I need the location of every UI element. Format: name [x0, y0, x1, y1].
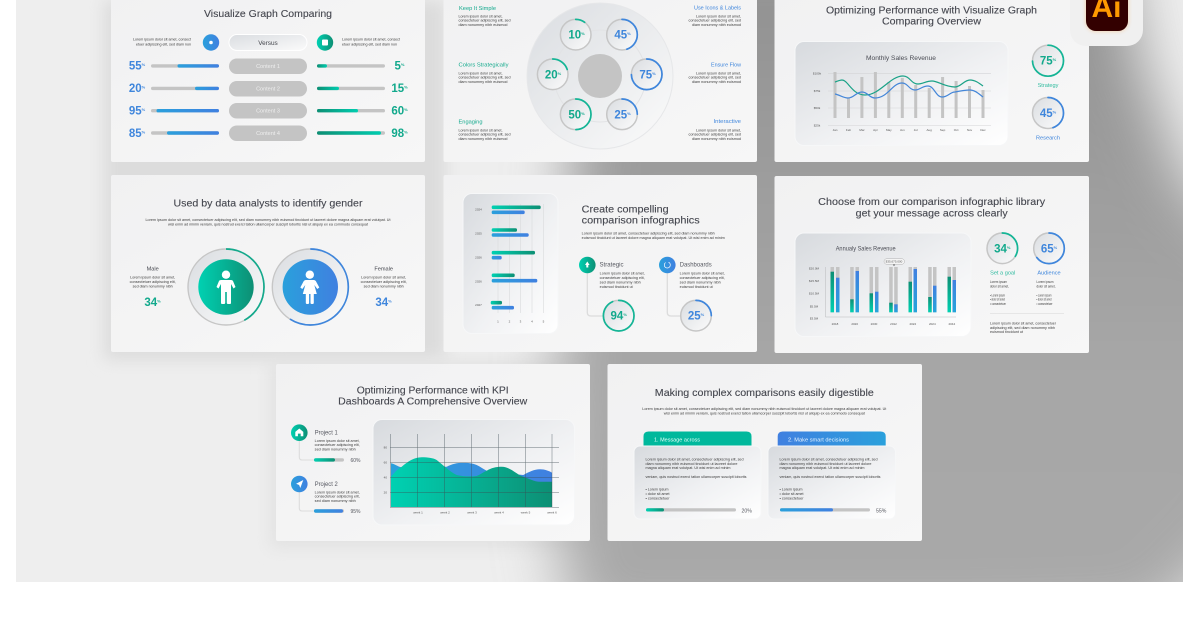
card: make smart decisions: veniam, quis nostrud exerci tation ullamcorper suscipit lobortis [780, 475, 881, 479]
heading: Create compelling [582, 204, 669, 216]
project 1: sed diam nonummy nibh [315, 448, 356, 452]
donut: strategy 75% [1032, 45, 1064, 89]
set a goal text: Lorem ipsum [990, 280, 1007, 284]
row: content 4: % [404, 130, 408, 134]
strategic text: euismod tincidunt ut [600, 285, 633, 289]
card: message across: diam nonummy nibh euismod tincidunt ut laoreet dolore [646, 462, 738, 466]
chart: annual sales revenue: 2012 [890, 322, 897, 326]
chart: horizontal bars: 1 [497, 320, 499, 324]
donut 75%: % [652, 71, 656, 76]
donut: 25%: % [701, 312, 705, 317]
card: message across: • consectetuer [646, 496, 670, 500]
donut 25%: % [627, 111, 631, 116]
chart: monthly sales revenue: $50k [814, 106, 821, 110]
description: euismod tincidunt ut laoreet dolore magna aliquam erat volutpat. Ut wisi enim ad minim [582, 236, 725, 240]
audience text: Audience [1037, 270, 1061, 276]
right description: etuer adipiscing elit, sed diam non [342, 42, 397, 46]
radial disc [527, 3, 673, 149]
donut 45% [607, 19, 637, 50]
left description [133, 38, 191, 46]
panel: compelling comparison [444, 175, 757, 352]
description [146, 218, 390, 226]
row: content 2: 15 [391, 83, 404, 95]
connectors [299, 440, 314, 511]
row: content 4: 98 [391, 128, 404, 140]
tab: make smart decisions [778, 432, 886, 447]
use icons and labels: Lorem ipsum dolor sit amet, [696, 14, 741, 18]
colors strategically: Lorem ipsum dolor sit amet, [458, 72, 502, 76]
versus pill: Versus [258, 40, 278, 47]
row: content 2 [129, 81, 408, 96]
donut: research 45%: 45 [1040, 108, 1053, 120]
row: content 4: 85 [129, 128, 142, 140]
chart: monthly sales revenue: Nov [967, 128, 973, 132]
card: message across: • Lorem ipsum [646, 488, 669, 492]
set a goal text: • consectetuer [990, 302, 1007, 306]
donut 10%: % [581, 31, 585, 36]
row: content 3: % [142, 107, 146, 112]
chart: horizontal bars: 2027 [475, 303, 482, 307]
panel: visualize graph comparing [111, 0, 425, 162]
project 2: Lorem ipsum dolor sit amet, [315, 490, 360, 494]
ensure flow: Ensure Flow [711, 62, 742, 68]
chart: area comparison [373, 420, 574, 525]
card: make smart decisions [768, 446, 896, 519]
icon: strategic [579, 257, 596, 273]
interactive: diam nonummy nibh euismod [692, 137, 741, 141]
description: Lorem ipsum dolor sit amet, consectetuer adipiscing elit, sed diam nonummy nibh [582, 232, 715, 236]
chart: monthly sales revenue: Mar [859, 128, 865, 132]
chart: annual sales revenue: Annualy Sales Revenue [836, 246, 896, 252]
donut: strategy 75%: % [1053, 57, 1057, 62]
tab: message across: 1. Message across [654, 438, 700, 444]
title: Choose from our comparison infographic library [818, 196, 1046, 208]
card: message across: veniam, quis nostrud exerci tation ullamcorper suscipit lobortis [646, 475, 747, 479]
description: wisi enim ad minim veniam, quis nostrud exerci tation ullamcorper suscipit lobortis nisl ut aliquip ex ea commodo consequat [168, 222, 368, 226]
chart: annual sales revenue: 2024 [929, 322, 936, 326]
card: message across [634, 446, 761, 519]
title: get your message across clearly [856, 207, 1008, 219]
row: content 3: 60 [391, 106, 404, 118]
dashboards text: Lorem ipsum dolor sit amet, [680, 272, 725, 276]
right description [342, 38, 400, 46]
donut 45%: % [627, 31, 631, 36]
dashboards text: Dashboards [680, 262, 712, 268]
row: content 1: 5 [395, 60, 401, 72]
interactive: Interactive [714, 119, 741, 125]
male text [130, 266, 176, 309]
footer text: Lorem ipsum dolor sit amet, consectetuer [990, 322, 1057, 326]
title: Making complex comparisons easily digestible [655, 387, 874, 399]
chart: annual sales revenue: 2020 [851, 322, 858, 326]
audience text: dolor sit amet, [1036, 284, 1056, 288]
strategic text: consectetuer adipiscing elit, [600, 276, 645, 280]
description: wisi enim ad minim veniam, quis nostrud exerci tation ullamcorper suscipit lobortis nisl ut aliquip ex ea commodo consequat [664, 411, 865, 415]
left description: Lorem ipsum dolor sit amet, consect [133, 38, 191, 42]
description: Lorem ipsum dolor sit amet, consectetuer adipiscing elit, sed diam nonummy nibh euismod tincidunt ut laoreet dolore magna aliquam erat volutpat. Ut [146, 218, 390, 222]
donut: research 45% [1032, 98, 1064, 142]
ensure flow: diam nonummy nibh euismod [692, 80, 741, 84]
card: make smart decisions: • consectetuer [780, 496, 804, 500]
donut 50%: 50 [568, 109, 581, 121]
female text: 34 [375, 297, 388, 309]
strategic text [600, 262, 645, 289]
chart: annual sales revenue: $20.0M [809, 266, 819, 270]
chart: area comparison: 40 [384, 476, 387, 480]
strategic text: Strategic [600, 262, 624, 268]
project 2: 95% [350, 509, 361, 515]
chart: monthly sales revenue: Oct [954, 128, 959, 132]
row: content 1: % [142, 62, 146, 67]
icon: home [291, 424, 308, 441]
card: make smart decisions: diam nonummy nibh euismod tincidunt ut laoreet dolore [780, 462, 872, 466]
chart: annual sales revenue: $5.5M [810, 304, 819, 308]
card: message across: • dolor sit amet [646, 492, 670, 496]
female text: sed diam nonummy nibh [364, 284, 404, 288]
card: message across: 20% [742, 508, 752, 514]
gauge: female [272, 249, 348, 325]
row: content 2: Content 2 [256, 86, 280, 92]
right description: Lorem ipsum dolor sit amet, consect [342, 38, 400, 42]
female text: Lorem ipsum dolor sit amet, [361, 276, 406, 280]
chart: monthly sales revenue: May [886, 128, 892, 132]
dashboards text: euismod tincidunt ut [680, 285, 713, 289]
panel: gender analysis [111, 175, 425, 352]
chart: area comparison: week 1 [413, 510, 423, 514]
project 1: Project 1 [315, 430, 338, 436]
chart: area comparison: week 6 [547, 510, 557, 514]
interactive [688, 119, 741, 141]
row: content 2: % [142, 84, 146, 90]
icon: male figure [216, 270, 236, 304]
project 1 [314, 430, 361, 464]
title: Optimizing Performance with Visualize Graph [826, 4, 1037, 16]
donut 45%: 45 [614, 30, 627, 42]
chart: monthly sales revenue: Jun [900, 128, 905, 132]
set a goal text [990, 270, 1015, 306]
chart: annual sales revenue: $10.5M [809, 292, 819, 296]
title: Comparing Overview [882, 16, 981, 28]
title [338, 384, 528, 408]
keep it simple: Lorem ipsum dolor sit amet, [458, 14, 502, 18]
title: Used by data analysts to identify gender [174, 198, 363, 210]
chart: annual sales revenue: 2030 [871, 322, 878, 326]
chart: area comparison: week 5 [521, 510, 531, 514]
keep it simple: diam nonummy nibh euismod [458, 23, 508, 27]
keep it simple: Keep It Simple [459, 6, 496, 12]
male text: % [157, 298, 161, 304]
male text: Lorem ipsum dolor sit amet, [130, 276, 175, 280]
chart: annual sales revenue [795, 233, 971, 336]
donut: set a goal 34%: % [1007, 245, 1011, 250]
donut: 94%: 94 [611, 311, 623, 323]
footer text: euismod tincidunt ut [990, 330, 1023, 334]
engaging: Lorem ipsum dolor sit amet, [458, 128, 502, 132]
row: content 4: Content 4 [256, 131, 280, 137]
chart: horizontal bars [463, 194, 558, 334]
icon: adobe illustrator badge [1070, 0, 1143, 46]
project 1: Lorem ipsum dolor sit amet, [315, 439, 360, 443]
card: make smart decisions: magna aliquam erat volutpat. Ut wisi enim ad minim [780, 466, 865, 470]
donut: strategy 75%: 75 [1040, 56, 1053, 68]
colors strategically [458, 62, 510, 84]
card: make smart decisions: • dolor sit amet [780, 492, 804, 496]
chart: annual sales revenue: $3.5M [810, 316, 819, 320]
colors strategically: Colors Strategically [458, 62, 509, 68]
chart: horizontal bars: 2025 [475, 232, 482, 236]
audience text: Lorem ipsum [1036, 280, 1054, 284]
set a goal text: • dolor sit amet [990, 298, 1005, 302]
audience text: • consectetuer [1036, 302, 1053, 306]
donut 25%: 25 [614, 109, 627, 121]
card: message across: Lorem ipsum dolor sit amet, consectetuer adipiscing elit, sed [646, 458, 744, 462]
chart: area comparison: 60 [384, 461, 387, 465]
male text: Male [147, 266, 159, 272]
tab: make smart decisions: 2. Make smart decisions [788, 438, 849, 444]
chart: monthly sales revenue: Feb [846, 128, 851, 132]
chart: monthly sales revenue: Sep [940, 128, 946, 132]
panel: monthly sales overview [774, 0, 1089, 162]
donut: research 45%: Research [1036, 136, 1060, 142]
title [818, 196, 1046, 219]
heading [582, 204, 700, 227]
row: content 1: % [401, 62, 405, 67]
chart: monthly sales revenue: Aug [927, 128, 932, 132]
chart: horizontal bars: 3 [520, 320, 522, 324]
interactive: Lorem ipsum dolor sit amet, [696, 128, 741, 132]
colors strategically: diam nonummy nibh euismod [458, 80, 508, 84]
card: message across: magna aliquam erat volutpat. Ut wisi enim ad minim [646, 466, 731, 470]
panel: radial comparison [444, 0, 757, 162]
icon: navigation [291, 476, 308, 492]
set a goal text: Set a goal [990, 270, 1015, 276]
row: content 3: % [404, 107, 408, 112]
footer text: adipiscing elit, sed diam nonummy nibh [990, 326, 1055, 330]
heading: comparison infographics [582, 215, 700, 227]
donut: 25% [681, 300, 711, 331]
row: content 3 [129, 103, 408, 118]
donut 20%: 20 [545, 69, 558, 81]
engaging [458, 120, 510, 141]
versus pill [229, 34, 307, 50]
chart: monthly sales revenue: $25k [814, 124, 821, 128]
keep it simple: consectetuer adipiscing elit, sed [458, 19, 510, 23]
chart: monthly sales revenue: Dec [980, 128, 986, 132]
project 1: 60% [350, 458, 361, 464]
chart: horizontal bars: 2026 [475, 256, 482, 260]
donut 10%: 10 [568, 30, 581, 42]
use icons and labels: Use Icons & Labels [694, 6, 741, 12]
use icons and labels: diam nonummy nibh euismod [692, 23, 741, 27]
chart: horizontal bars: 2026 [475, 280, 482, 284]
donut: strategy 75%: Strategy [1038, 83, 1059, 89]
engaging: Engaging [458, 120, 482, 126]
engaging: consectetuer adipiscing elit, sed [458, 133, 510, 137]
audience text: • dolor sit amet [1036, 298, 1052, 302]
left description: etuer adipiscing elit, sed diam non [136, 42, 191, 46]
row: content 1 [129, 58, 405, 74]
chart: area comparison: week 3 [467, 510, 477, 514]
icon: teal badge [317, 34, 333, 51]
colors strategically: consectetuer adipiscing elit, sed [458, 76, 510, 80]
donut: set a goal 34%: 34 [994, 243, 1007, 255]
use icons and labels: consectetuer adipiscing elit, sed [688, 19, 741, 23]
row: content 3: 95 [129, 106, 142, 118]
female text: consectetuer adipiscing elit, [361, 280, 407, 284]
audience text [1036, 270, 1061, 306]
female text: % [388, 298, 392, 304]
tab: message across [644, 432, 752, 447]
chart: monthly sales revenue: $100k [813, 72, 822, 76]
strategic text: sed diam nonummy nibh [600, 280, 641, 284]
row: content 4: % [142, 130, 146, 134]
donut 20% [537, 59, 568, 90]
audience text: • Lorem ipsum [1036, 293, 1052, 297]
chart: annual sales revenue: 2022 [909, 322, 916, 326]
chart: annual sales revenue: $35,675.000 [886, 260, 903, 264]
panel: digestible comparisons [608, 364, 922, 541]
male text: 34 [144, 297, 157, 309]
chart: monthly sales revenue [795, 42, 1008, 146]
row: content 1: Content 1 [256, 64, 280, 70]
ensure flow [688, 62, 742, 84]
female text [361, 266, 407, 309]
panel: comparison library [774, 176, 1089, 353]
row: content 2: 20 [129, 83, 142, 95]
chart: monthly sales revenue: Jan [833, 128, 838, 132]
donut: 94% [603, 300, 634, 331]
icon: blue badge [203, 34, 219, 51]
chart: horizontal bars: 2 [509, 320, 511, 324]
female text: Female [374, 266, 393, 272]
chart: horizontal bars: 2024 [475, 208, 482, 212]
row: content 4 [129, 126, 408, 141]
donut 50% [560, 99, 591, 130]
donut 10% [560, 19, 591, 50]
use icons and labels [688, 6, 741, 27]
project 2 [314, 482, 361, 515]
dashboards text [680, 262, 725, 289]
donut: audience 65%: % [1054, 245, 1058, 250]
card: make smart decisions: Lorem ipsum dolor sit amet, consectetuer adipiscing elit, sed [780, 458, 878, 462]
keep it simple [458, 6, 510, 27]
project 2: sed diam nonummy nibh [315, 499, 356, 503]
chart: monthly sales revenue: Apr [873, 128, 878, 132]
donut: audience 65%: 65 [1041, 243, 1054, 255]
project 1: consectetuer adipiscing elit, [315, 443, 360, 447]
title: Optimizing Performance with KPI [357, 384, 509, 396]
row: content 1: 55 [129, 60, 142, 72]
male text: consectetuer adipiscing elit, [130, 280, 176, 284]
interactive: consectetuer adipiscing elit, sed [688, 133, 741, 137]
donut 75% [631, 59, 662, 90]
card: make smart decisions: 55% [876, 508, 887, 514]
chart: area comparison: week 4 [494, 510, 504, 514]
chart: area comparison: week 2 [440, 510, 450, 514]
donut 25% [607, 99, 637, 130]
panel: KPI dashboards [276, 364, 590, 541]
chart: monthly sales revenue: Monthly Sales Revenue [866, 55, 936, 62]
row: content 2: % [404, 84, 408, 90]
description [642, 407, 886, 415]
male text: sed diam nonummy nibh [133, 284, 173, 288]
donut: audience 65% [1034, 233, 1064, 264]
description: Lorem ipsum dolor sit amet, consectetuer adipiscing elit, sed diam nonummy nibh euismod tincidunt ut laoreet dolore magna aliquam erat volutpat. Ut [642, 407, 886, 411]
donut: 25%: 25 [688, 311, 701, 323]
chart: area comparison: 20 [384, 491, 387, 495]
donut 20%: % [558, 71, 562, 76]
chart: annual sales revenue: $15.5M [809, 279, 819, 283]
ensure flow: consectetuer adipiscing elit, sed [688, 76, 741, 80]
dashboards text: consectetuer adipiscing elit, [680, 276, 725, 280]
donut 75%: 75 [639, 69, 652, 81]
title: Visualize Graph Comparing [204, 8, 332, 20]
icon: female figure [300, 270, 319, 304]
icon: dashboards [659, 257, 676, 273]
donut: research 45%: % [1053, 110, 1057, 114]
description [582, 232, 725, 240]
donut 50%: % [581, 111, 585, 116]
chart: annual sales revenue: 2018 [832, 322, 839, 326]
chart: monthly sales revenue: $75k [814, 89, 821, 93]
dashboards text: sed diam nonummy nibh [680, 280, 721, 284]
footer text [990, 322, 1057, 334]
set a goal text: dolor sit amet, [990, 284, 1009, 288]
ensure flow: Lorem ipsum dolor sit amet, [696, 72, 741, 76]
chart: horizontal bars: 5 [543, 320, 545, 324]
chart: horizontal bars: 4 [531, 320, 533, 324]
row: content 3: Content 3 [256, 108, 280, 114]
engaging: diam nonummy nibh euismod [458, 137, 508, 141]
chart: area comparison: 80 [384, 446, 387, 450]
project 2: consectetuer adipiscing elit, [315, 495, 360, 499]
title: Dashboards A Comprehensive Overview [338, 396, 528, 408]
donut: 94%: % [623, 312, 627, 317]
gauge: male [188, 249, 264, 325]
connectors [587, 272, 681, 316]
title [826, 4, 1037, 28]
strategic text: Lorem ipsum dolor sit amet, [600, 272, 645, 276]
card: make smart decisions: • Lorem ipsum [780, 488, 803, 492]
set a goal text: • Lorem ipsum [990, 293, 1005, 297]
project 2: Project 2 [315, 482, 338, 488]
chart: annual sales revenue: 2044 [948, 322, 955, 326]
donut: set a goal 34% [987, 233, 1018, 264]
chart: monthly sales revenue: Jul [914, 128, 918, 132]
